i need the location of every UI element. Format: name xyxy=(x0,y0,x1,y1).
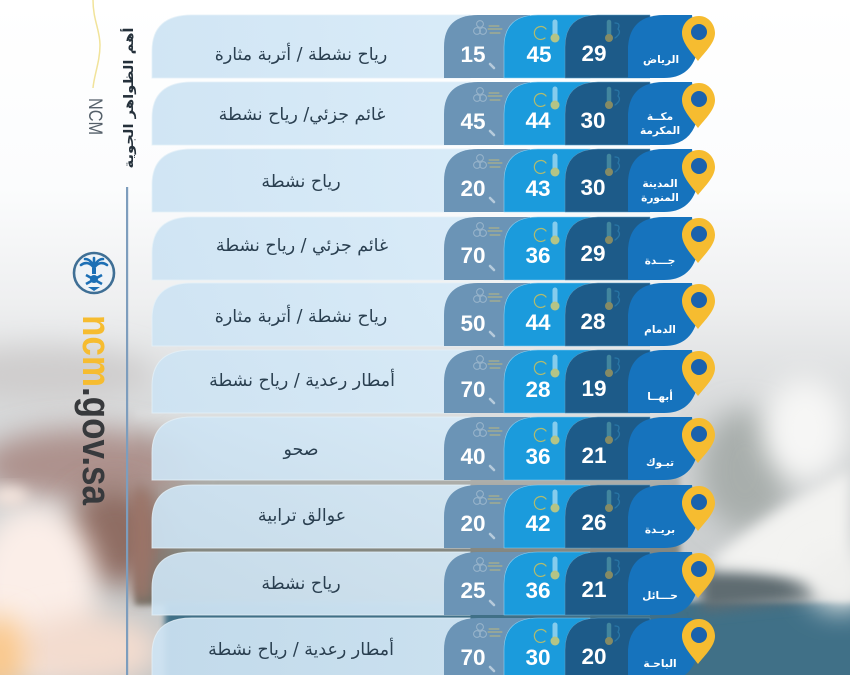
row: Makkah xyxy=(152,82,715,145)
row: Madinah: 43 xyxy=(525,176,551,201)
row: Riyadh xyxy=(152,15,715,78)
row: Abha: أبهــا xyxy=(647,389,673,403)
row: Buraydah: 20 xyxy=(460,511,486,536)
decorative gold curve xyxy=(93,0,100,88)
row: Makkah: 30 xyxy=(580,108,606,133)
row: Makkah: 45 xyxy=(460,109,486,134)
row: Makkah: مكــة xyxy=(647,111,673,123)
website address: ncm.gov.sa xyxy=(74,315,118,506)
row: Dammam: رياح نشطة / أتربة مثارة xyxy=(215,305,387,327)
row: Tabuk: صحو xyxy=(283,440,318,460)
row: Hail: 21 xyxy=(581,577,607,602)
icon: NCM logo xyxy=(74,253,114,293)
row: Riyadh: رياح نشطة / أتربة مثارة xyxy=(215,43,387,65)
row: Buraydah: بريـدة xyxy=(645,524,675,536)
row: Madinah: 30 xyxy=(580,175,606,200)
row: Jeddah: غائم جزئي / رياح نشطة xyxy=(216,236,388,256)
row: Abha: أمطار رعدية / رياح نشطة xyxy=(209,369,395,391)
row: Al Bahah: 20 xyxy=(581,644,607,669)
row: Dammam: 28 xyxy=(580,309,606,334)
heading: main weather phenomena: أهم الظواهر الجوية xyxy=(120,28,137,168)
row: Dammam: 50 xyxy=(460,311,486,336)
row: Dammam: الدمام xyxy=(644,324,676,336)
row: Abha: 70 xyxy=(460,377,486,402)
row: Madinah: المدينة xyxy=(642,178,678,190)
row: Hail: 25 xyxy=(460,578,486,603)
row: Abha: 28 xyxy=(525,377,551,402)
row: Buraydah: عوالق ترابية xyxy=(258,506,346,526)
row: Riyadh: 45 xyxy=(526,42,552,67)
row: Buraydah: 26 xyxy=(581,510,607,535)
row: Riyadh: 29 xyxy=(581,41,607,66)
row: Al Bahah: 70 xyxy=(460,645,486,670)
row: Tabuk: 36 xyxy=(525,444,551,469)
NCM label: NCM xyxy=(84,98,105,135)
row: Jeddah: جـــدة xyxy=(645,255,675,267)
row: Tabuk xyxy=(152,417,715,480)
row: Jeddah: 29 xyxy=(580,241,606,266)
row: Madinah xyxy=(152,149,715,212)
row: Al Bahah: أمطار رعدية / رياح نشطة xyxy=(208,638,394,660)
row: Al Bahah: الباحـة xyxy=(643,658,677,670)
row: Makkah: 44 xyxy=(525,108,551,133)
vertical divider xyxy=(126,187,128,675)
row: Riyadh: 15 xyxy=(460,42,486,67)
row: Tabuk: تبـوك xyxy=(646,457,674,469)
row: Madinah: 20 xyxy=(460,176,486,201)
row: Jeddah xyxy=(152,217,715,280)
row: Abha xyxy=(152,350,715,413)
row: Makkah: غائم جزئي/ رياح نشطة xyxy=(219,105,385,125)
row: Hail: حـــائل xyxy=(642,590,678,602)
row: Hail: 36 xyxy=(525,578,551,603)
row: Madinah: رياح نشطة xyxy=(261,172,341,192)
row: Buraydah: 42 xyxy=(525,511,551,536)
row: Hail xyxy=(152,552,715,615)
row: Makkah: المكرمة xyxy=(640,125,680,137)
row: Tabuk: 21 xyxy=(581,443,607,468)
row: Jeddah: 70 xyxy=(460,243,486,268)
row: Madinah: المنورة xyxy=(641,192,679,204)
row: Riyadh: الرياض xyxy=(643,54,679,66)
row: Hail: رياح نشطة xyxy=(261,574,341,594)
row: Al Bahah: 30 xyxy=(525,645,551,670)
row: Al Bahah xyxy=(152,618,715,675)
row: Dammam: 44 xyxy=(525,310,551,335)
row: Dammam xyxy=(152,283,715,346)
row: Jeddah: 36 xyxy=(525,243,551,268)
row: Buraydah xyxy=(152,485,715,548)
row: Tabuk: 40 xyxy=(460,444,486,469)
row: Abha: 19 xyxy=(581,376,607,401)
